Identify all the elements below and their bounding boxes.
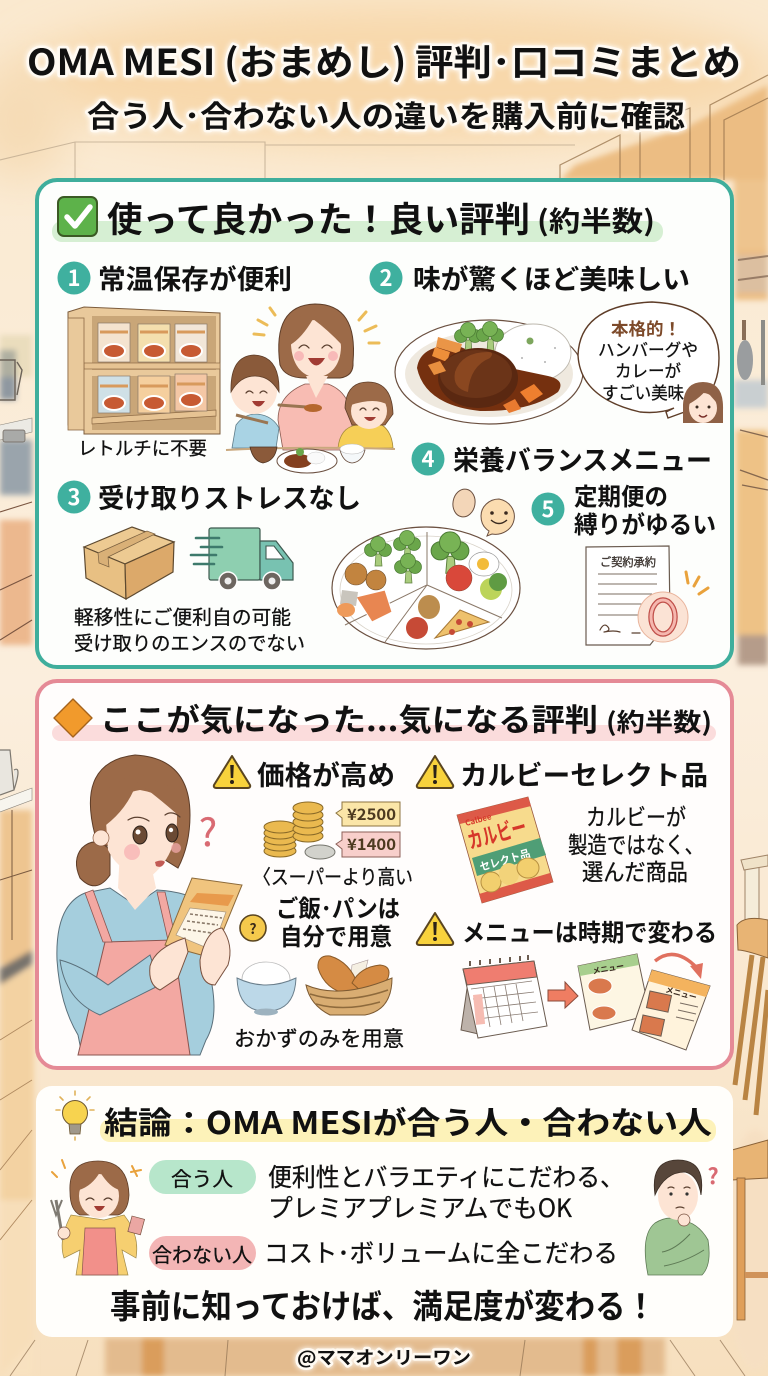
conclusion heading xyxy=(56,1091,716,1143)
delivery caption: 受け取りのエンスのでない xyxy=(74,627,305,656)
item 5 number and title: 5 xyxy=(542,492,554,524)
concern 3: calbee select: 製造ではなく、 xyxy=(568,826,704,860)
concern 3: calbee select: 選んだ商品 xyxy=(582,853,688,887)
mismatch text: コスト･ボリュームに全こだわる xyxy=(264,1234,618,1270)
illustration: happy mother and children xyxy=(226,304,395,473)
concern title: 価格が高め xyxy=(257,754,395,793)
icon: warning xyxy=(214,756,250,788)
title xyxy=(27,34,741,136)
concerns heading xyxy=(52,695,716,741)
match text: 便利性とバラエティにこだわる、 xyxy=(268,1158,624,1194)
speech bubble: ハンバーグや xyxy=(598,336,698,361)
item 5 number and title xyxy=(532,477,716,540)
icon: question circle xyxy=(240,915,266,941)
match pill: 合う人 xyxy=(171,1163,233,1192)
price tag high xyxy=(336,802,400,826)
arrow: calendar to menu xyxy=(548,982,578,1008)
title line 1: OMA MESI (おまめし) 評判･口コミまとめ xyxy=(27,34,741,86)
illustration: chips bag: カルビー xyxy=(464,809,530,856)
conclusion message: 事前に知っておけば、満足度が変わる！ xyxy=(110,1280,656,1328)
item 1 number and title: 1 xyxy=(68,261,80,293)
mismatch row xyxy=(149,1234,618,1270)
illustration: happy woman with fork xyxy=(51,1160,145,1275)
icon: menu sheets: メニュー xyxy=(592,961,625,977)
panel: conclusion xyxy=(36,1086,733,1337)
heading text: 使って良かった！良い評判 xyxy=(107,192,530,243)
icon: warning xyxy=(417,913,453,945)
icon: contract with zero: ご契約承約 xyxy=(600,554,656,570)
match pill xyxy=(149,1160,256,1194)
illustration: pantry shelf xyxy=(68,307,220,434)
concern 1: price xyxy=(214,754,413,890)
item 4 number and title: 4 xyxy=(422,442,435,474)
panel: concerns xyxy=(37,681,732,1068)
item 5 number and title: 定期便の xyxy=(574,477,668,512)
rice and bread note: おかずのみを用意 xyxy=(234,1023,404,1053)
concern 2: rice and bread: 自分で用意 xyxy=(280,917,392,952)
calbee note: カルビーが xyxy=(586,798,686,832)
good reviews heading xyxy=(52,192,663,243)
icon: orange diamond xyxy=(54,699,92,737)
icon: warning xyxy=(417,756,453,788)
delivery caption: 軽移性にご便利自の可能 xyxy=(74,601,291,630)
concern title: ご飯･パンは xyxy=(276,889,400,924)
icon: coins xyxy=(264,802,335,859)
icon: calendar xyxy=(461,955,547,1038)
concern title: カルビーセレクト品 xyxy=(460,754,708,793)
item 3 number and title: 3 xyxy=(68,480,80,512)
illustration: chips bag: Calbee xyxy=(464,811,493,829)
item 2 number and title: 味が驚くほど美味しい xyxy=(413,258,690,297)
heading note: (約半数) xyxy=(537,200,655,240)
speech bubble: すごい美味 xyxy=(602,379,684,404)
mismatch pill: 合わない人 xyxy=(152,1239,252,1268)
illustration: thinking man: ? xyxy=(707,1159,719,1191)
icon: small woman face xyxy=(683,382,723,423)
chair xyxy=(732,855,768,1320)
icon: delivery truck xyxy=(191,528,293,590)
speech bubble xyxy=(578,302,723,423)
item 4 number and title: 栄養バランスメニュー xyxy=(453,439,712,478)
illustration: hamburg curry plate xyxy=(395,320,583,424)
icon: question circle: ? xyxy=(249,919,257,939)
icon: egg xyxy=(451,487,477,519)
price tag low xyxy=(336,832,400,857)
footer credit: @ママオンリーワン xyxy=(297,1344,471,1370)
speech bubble: カレーが xyxy=(615,357,681,382)
panel: good reviews xyxy=(37,180,732,667)
item 5 number and title: 縛りがゆるい xyxy=(574,505,716,540)
heading note: (約半数) xyxy=(606,703,712,739)
illustration: worried woman with package: ? xyxy=(199,802,217,857)
subtitle: 合う人･合わない人の違いを購入前に確認 xyxy=(87,92,685,136)
item 2 number and title: 2 xyxy=(380,261,392,293)
icon: smile bubble xyxy=(481,499,514,536)
heading text: 結論：OMA MESIが合う人・合わない人 xyxy=(104,1098,712,1143)
illustration: balanced food plate xyxy=(332,527,520,649)
price note: 〈スーパーより高い xyxy=(253,861,413,890)
speech bubble: 本格的！ xyxy=(611,315,681,340)
concern title: メニューは時期で変わる xyxy=(462,913,717,948)
price tag low: ¥1400 xyxy=(347,833,396,855)
icon: light bulb xyxy=(56,1091,94,1140)
match row: プレミアプレミアムでもOK xyxy=(268,1189,573,1225)
icon: menu sheets xyxy=(578,954,710,1050)
delivery caption xyxy=(74,601,305,656)
icon: rice bowl xyxy=(237,962,296,1016)
illustration: chips bag xyxy=(457,797,553,903)
icon: green check xyxy=(58,197,97,236)
illustration: thinking man xyxy=(645,1159,719,1275)
heading text: ここが気になった...気になる評判 xyxy=(100,695,598,740)
price tag high: ¥2500 xyxy=(347,803,396,825)
icon: menu sheets: メニュー xyxy=(664,984,698,1003)
icon: bread basket xyxy=(306,956,392,1015)
concern 4: menu changes xyxy=(417,913,717,1050)
concern 3: calbee select xyxy=(417,754,708,903)
item 1 number and title: 常温保存が便利 xyxy=(98,258,292,297)
match row xyxy=(149,1158,624,1225)
shelf caption: レトルチに不要 xyxy=(78,435,207,461)
item 3 number and title: 受け取りストレスなし xyxy=(98,477,361,516)
concern 2: rice and bread xyxy=(234,889,404,1053)
icon: contract with zero xyxy=(586,546,708,645)
illustration: worried woman with package xyxy=(57,755,242,1055)
illustration: chips bag: セレクト品 xyxy=(478,845,532,875)
icon: cardboard box xyxy=(84,527,174,599)
